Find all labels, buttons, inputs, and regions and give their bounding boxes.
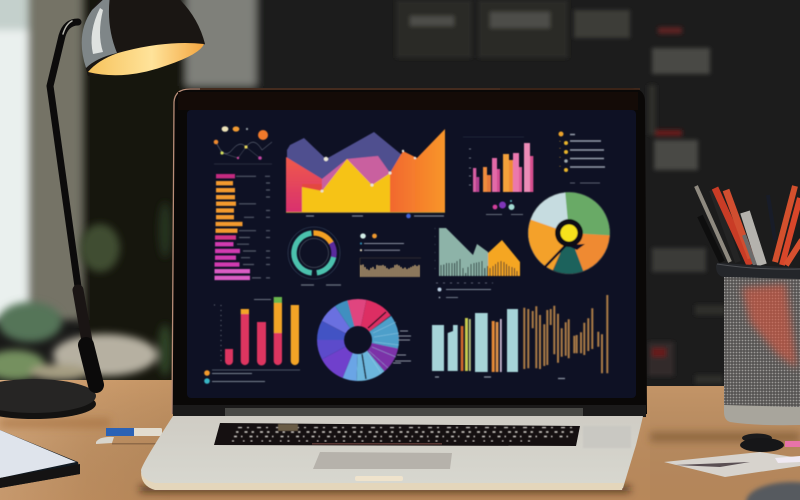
desk lamp bbox=[0, 0, 205, 419]
bottom right pale and orange bars bbox=[432, 309, 565, 378]
pie hub bbox=[555, 219, 583, 247]
keyboard bbox=[214, 423, 580, 446]
binder clips and papers bbox=[664, 434, 800, 500]
notebook on desk bbox=[0, 430, 80, 488]
area and bar combo chart bbox=[435, 228, 520, 283]
background: blurred chalkboard notes bbox=[396, 0, 725, 384]
x-axis labels bbox=[435, 377, 565, 378]
cup rim bbox=[716, 263, 800, 279]
ring chart bbox=[287, 226, 341, 285]
legend list top right bbox=[558, 132, 605, 183]
pencils bbox=[696, 186, 800, 265]
laptop bbox=[141, 88, 647, 490]
pen on desk bbox=[96, 428, 162, 444]
pie chart with center hub bbox=[528, 192, 610, 274]
laptop front notch bbox=[355, 476, 403, 481]
legend dots top left bbox=[222, 126, 268, 140]
laptop lid bbox=[172, 88, 647, 414]
area chart axis labels bbox=[306, 214, 444, 218]
red area bbox=[286, 157, 322, 212]
small grouped bar chart bbox=[463, 137, 533, 214]
bar labels bbox=[236, 176, 270, 278]
orange area bbox=[390, 129, 445, 212]
lamp base bbox=[0, 379, 96, 419]
trackpad bbox=[313, 452, 452, 469]
pencil holder bbox=[696, 186, 800, 425]
small legend and beige bars bbox=[360, 233, 421, 277]
lamp light bbox=[88, 43, 204, 75]
stacked area chart bbox=[286, 129, 445, 218]
area chart markers bbox=[321, 150, 416, 192]
bottom segmented donut chart bbox=[319, 301, 411, 379]
stacked bar legend bbox=[204, 370, 265, 384]
bottom left stacked bar chart bbox=[204, 297, 300, 384]
purple area bbox=[287, 132, 402, 212]
pink area bbox=[322, 156, 390, 212]
donut callouts bbox=[393, 331, 411, 363]
lamp arm bbox=[50, 21, 98, 385]
bottom right thin brown bars bbox=[524, 295, 607, 373]
horizontal bar chart bbox=[214, 174, 270, 280]
right palm-rest panel bbox=[583, 426, 631, 448]
background: blurred plants and bowl bbox=[0, 202, 172, 380]
bar chart mini legend bbox=[486, 200, 523, 214]
lamp shade bbox=[82, 0, 205, 76]
laptop screen bbox=[187, 110, 636, 398]
mesh cup bbox=[724, 276, 800, 408]
laptop hinge bbox=[173, 405, 646, 417]
yellow area bbox=[302, 159, 390, 212]
cup base bbox=[724, 405, 800, 425]
combo chart legend bbox=[438, 288, 491, 298]
desk surface bbox=[0, 380, 800, 500]
pencil shadows through mesh bbox=[742, 284, 797, 368]
line chart top left bbox=[214, 140, 272, 164]
dashboard on screen bbox=[204, 126, 610, 384]
laptop keyboard deck bbox=[141, 416, 643, 490]
